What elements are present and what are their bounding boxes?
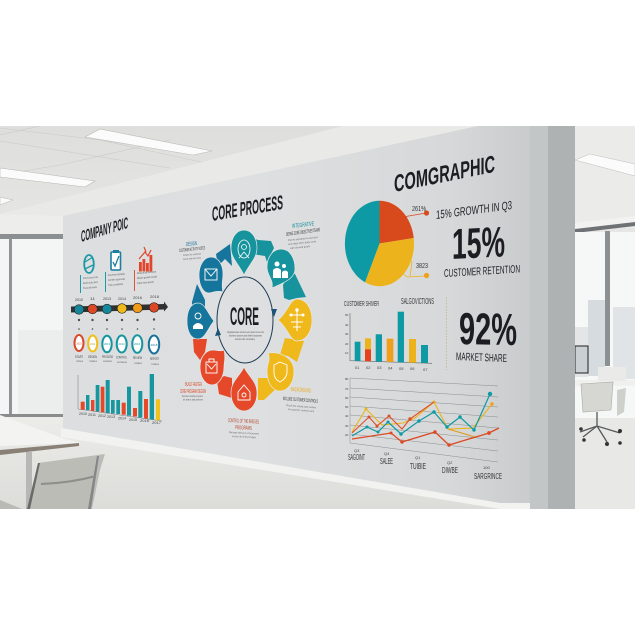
- bar chart captions: 2015: [129, 418, 137, 422]
- line chart x labels: Q4: [384, 451, 390, 456]
- callout: top left: [179, 241, 205, 261]
- icon: rising bar chart: [139, 247, 152, 272]
- text block: column notes: [80, 269, 158, 293]
- callout: top left: needs and map them: [183, 257, 201, 261]
- timeline labels: [75, 294, 160, 302]
- step: right yellow petal: [278, 299, 312, 341]
- line chart x labels: Q2: [447, 460, 453, 465]
- ring badge text: 2014: [118, 342, 125, 346]
- ceiling light: main: [85, 129, 212, 155]
- series: yellow: [352, 400, 494, 432]
- desk: [575, 380, 635, 386]
- stat: growth heading: 15% GROWTH IN Q3: [436, 198, 512, 222]
- line chart: [350, 378, 499, 462]
- stat: market share label: MARKET SHARE: [456, 351, 507, 365]
- ring badges: [74, 335, 159, 354]
- callout: bottom left: [180, 382, 206, 402]
- callout: bottom center: [228, 418, 260, 439]
- ring badge text: 2010: [76, 342, 82, 346]
- line chart axis labels: [345, 377, 349, 437]
- text block: column notes: Measure performance: [137, 269, 156, 275]
- core description: Integrated steps connect every team to one core: [227, 331, 264, 334]
- text block: column notes: Confirm approvals: [108, 277, 126, 282]
- soffit band: [0, 126, 478, 216]
- grid lines: [350, 378, 498, 462]
- bar chart captions: [79, 412, 161, 425]
- callout: top right: [286, 221, 320, 250]
- foreground: chair: [27, 454, 105, 509]
- bar chart axis labels: 01: [355, 365, 360, 370]
- callout: top right: Plan the objectives for each team: [288, 236, 318, 242]
- callout: bottom left: BUILD FASTER: [185, 382, 202, 388]
- step: lower right yellow petal: [267, 353, 294, 391]
- pie chart: [345, 201, 414, 286]
- baseboard: [61, 428, 530, 509]
- bar chart: policy metrics: [78, 374, 162, 421]
- line chart x labels: SALEE: [380, 457, 393, 466]
- icon: cycle arrows: [84, 255, 94, 273]
- ring captions: notes: [117, 361, 129, 364]
- callout: top right: with shared goals: [290, 245, 311, 250]
- ring captions: notes: [134, 362, 143, 365]
- callout: top right: and align their daily work: [288, 240, 317, 246]
- office chair: [579, 382, 626, 446]
- panel: core process: [179, 192, 320, 439]
- top mask: [0, 0, 635, 126]
- text block: column notes: Ensure process notes: [83, 275, 98, 280]
- callout: bottom center: Manage delivery of programs: [229, 431, 260, 436]
- timeline marker dots: [78, 318, 155, 330]
- line chart x labels: SAGOINT: [348, 453, 365, 462]
- bar chart captions: 2010: [79, 412, 87, 416]
- line chart x labels: Q1: [415, 455, 421, 460]
- series: red upper: [352, 402, 434, 433]
- central ring: [215, 277, 277, 363]
- callout: top left: Collect the customer: [183, 253, 201, 257]
- ring badge text: 2013: [104, 342, 110, 346]
- stat: 92%: 92%: [459, 303, 517, 355]
- timeline labels: 11: [90, 296, 96, 301]
- panel: core process: CORE PROCESS: [212, 192, 283, 226]
- line chart axis labels: 50: [345, 405, 349, 409]
- pillar side: [548, 126, 575, 509]
- foreground: table: [0, 415, 80, 509]
- ceiling: [0, 126, 635, 236]
- line chart axis labels: 60: [345, 396, 349, 400]
- ceiling light: third: [0, 197, 13, 205]
- line chart axis labels: 70: [345, 387, 349, 391]
- ring captions: [75, 355, 160, 366]
- bar chart axis labels: [345, 313, 428, 372]
- ring badge text: [76, 342, 158, 347]
- panel: core process: CORE PROGRAM DESIGN: [180, 389, 206, 395]
- icon: clipboard: [111, 250, 120, 270]
- bar chart axis labels: 10: [345, 351, 349, 355]
- line chart x labels: 100: [483, 465, 490, 470]
- ring badge text: 2016: [134, 342, 140, 346]
- bar chart headings: SALGOVICTIONS: [401, 297, 434, 306]
- ceiling panel lines: [0, 126, 215, 175]
- ring captions: REPORT: [150, 357, 159, 361]
- panel: core process: CUSTOMER ACTIVITY NOTES: [179, 245, 205, 253]
- timeline labels: 2010: [75, 297, 84, 302]
- ring captions: notes: [103, 360, 113, 363]
- pie callout: red: [403, 206, 429, 217]
- panel: core process: CONTROL OF THE BRIDGES: [228, 418, 259, 426]
- bar chart captions: 2013: [107, 415, 115, 419]
- series: red lower: [352, 428, 499, 447]
- timeline labels: 2014: [118, 296, 127, 301]
- panel: company policy: COMPANY POIC: [81, 214, 128, 246]
- text block: column notes: Report growth results: [137, 274, 158, 280]
- bar chart captions: 2014: [118, 416, 126, 420]
- ring captions: PROCESS: [102, 355, 113, 359]
- bar chart captions: 2016: [140, 419, 149, 423]
- text block: column notes: Track compliance: [108, 282, 123, 287]
- bar chart axis labels: 05: [399, 366, 404, 371]
- step: left blue petal: [187, 303, 214, 339]
- pie callout: yellow: [401, 258, 429, 278]
- line chart x labels: [348, 448, 502, 481]
- bar chart axis labels: 20: [345, 342, 349, 346]
- bar chart axis labels: 03: [377, 365, 382, 370]
- callout: bottom left: for teams and partners: [183, 398, 204, 402]
- ring badge text: 2018: [150, 343, 158, 347]
- text block: column notes: Review policy items: [83, 280, 98, 285]
- step: bottom red petal: [231, 367, 257, 411]
- step: lower left red petal: [200, 350, 225, 385]
- line chart x labels: SARGRINCE: [474, 472, 502, 481]
- text block: column notes: Document standards: [108, 272, 125, 277]
- series: orange: [448, 429, 475, 437]
- stat: 15%: 15%: [452, 218, 505, 269]
- bottom mask: [0, 509, 635, 635]
- timeline labels: 2016: [133, 295, 143, 300]
- divider: dotted: [446, 297, 448, 370]
- text: INCLUDE CUSTOMER CONTROLS: [283, 396, 318, 405]
- process arrows: [192, 238, 306, 400]
- core description: across the company: [235, 338, 256, 341]
- line chart axis labels: 40: [345, 414, 349, 418]
- panel: core process: CORE: [230, 303, 259, 331]
- ring captions: notes: [151, 363, 160, 366]
- left window: [0, 234, 64, 417]
- callout: bottom left: Develop reusable programs: [182, 395, 204, 398]
- line chart axis labels: 30: [345, 424, 349, 428]
- heading: comgraphic: COMGRAPHIC: [394, 151, 495, 198]
- pie callout: red: 261%: [412, 206, 426, 213]
- office room scene: [0, 126, 635, 509]
- callout: top right: INTEGRATIVE: [292, 221, 314, 230]
- panel: company policy: [71, 214, 168, 425]
- stat: customer retention label: CUSTOMER RETENTION: [444, 263, 520, 280]
- step: top teal petal: [231, 230, 257, 275]
- ring badge text: 2011: [90, 342, 95, 346]
- callout: bottom right: BACKGROUND: [291, 387, 311, 395]
- ring captions: CONTROL: [116, 356, 127, 360]
- ring captions: REVIEW: [133, 356, 142, 360]
- ceiling light: second: [0, 168, 95, 187]
- panel: comgraphic: [344, 151, 520, 481]
- ring captions: START: [75, 355, 83, 359]
- callout: bottom center: across all of the bridges: [232, 435, 257, 439]
- line chart axis labels: 20: [345, 433, 349, 437]
- monitor: [575, 346, 588, 373]
- bar chart axis labels: 50: [345, 313, 349, 317]
- bar chart axis labels: 07: [423, 367, 428, 372]
- line chart x labels: TUIBIE: [410, 462, 426, 471]
- bar chart headings: [344, 297, 434, 308]
- series: teal: [352, 392, 492, 436]
- timeline labels: 2018: [150, 294, 160, 299]
- bar chart captions: 2011: [88, 413, 96, 417]
- timeline arrow: [71, 302, 168, 314]
- bar chart axis labels: 06: [410, 366, 415, 371]
- right room: [575, 126, 635, 509]
- step: upper right teal petal: [267, 249, 295, 288]
- callout: bottom right: [283, 387, 318, 413]
- ring captions: notes: [89, 360, 98, 363]
- bar chart captions: 2012: [98, 414, 106, 418]
- wall: [61, 126, 575, 509]
- line chart x labels: DIWBE: [442, 466, 458, 475]
- ring captions: notes: [76, 360, 84, 363]
- bar chart axis labels: 02: [366, 365, 371, 370]
- line chart x labels: Q3: [354, 448, 360, 453]
- text: DEFINE CORE OBJECTIVES TEAMS: [286, 227, 320, 238]
- ring captions: DESIGN: [88, 355, 98, 359]
- bar chart captions: 2017: [152, 421, 161, 425]
- floor: [0, 417, 500, 509]
- bar chart axis labels: 04: [388, 366, 393, 370]
- step: upper left blue petal: [199, 257, 223, 293]
- line chart axis labels: 80: [345, 377, 349, 381]
- callout: bottom right: all customer controls work: [288, 408, 315, 413]
- text block: column notes: Adjust every quarter: [137, 280, 154, 285]
- bar chart: customer: [350, 312, 432, 363]
- bar chart axis labels: 30: [345, 332, 349, 336]
- core description: business process and shared outcomes: [229, 334, 263, 338]
- bar chart axis labels: 40: [345, 323, 349, 327]
- pie callout: yellow: 3823: [416, 263, 428, 270]
- callout: bottom center: PROGRAMS: [235, 425, 252, 432]
- bar chart headings: CUSTOMER SHIVER: [344, 301, 379, 308]
- timeline labels: 2013: [103, 296, 112, 301]
- callout: top left: DESIGN: [186, 241, 197, 248]
- text block: column notes: Share with teams: [83, 285, 97, 290]
- callout: bottom right: Check the results and confirm: [286, 404, 316, 409]
- core description: [227, 331, 264, 341]
